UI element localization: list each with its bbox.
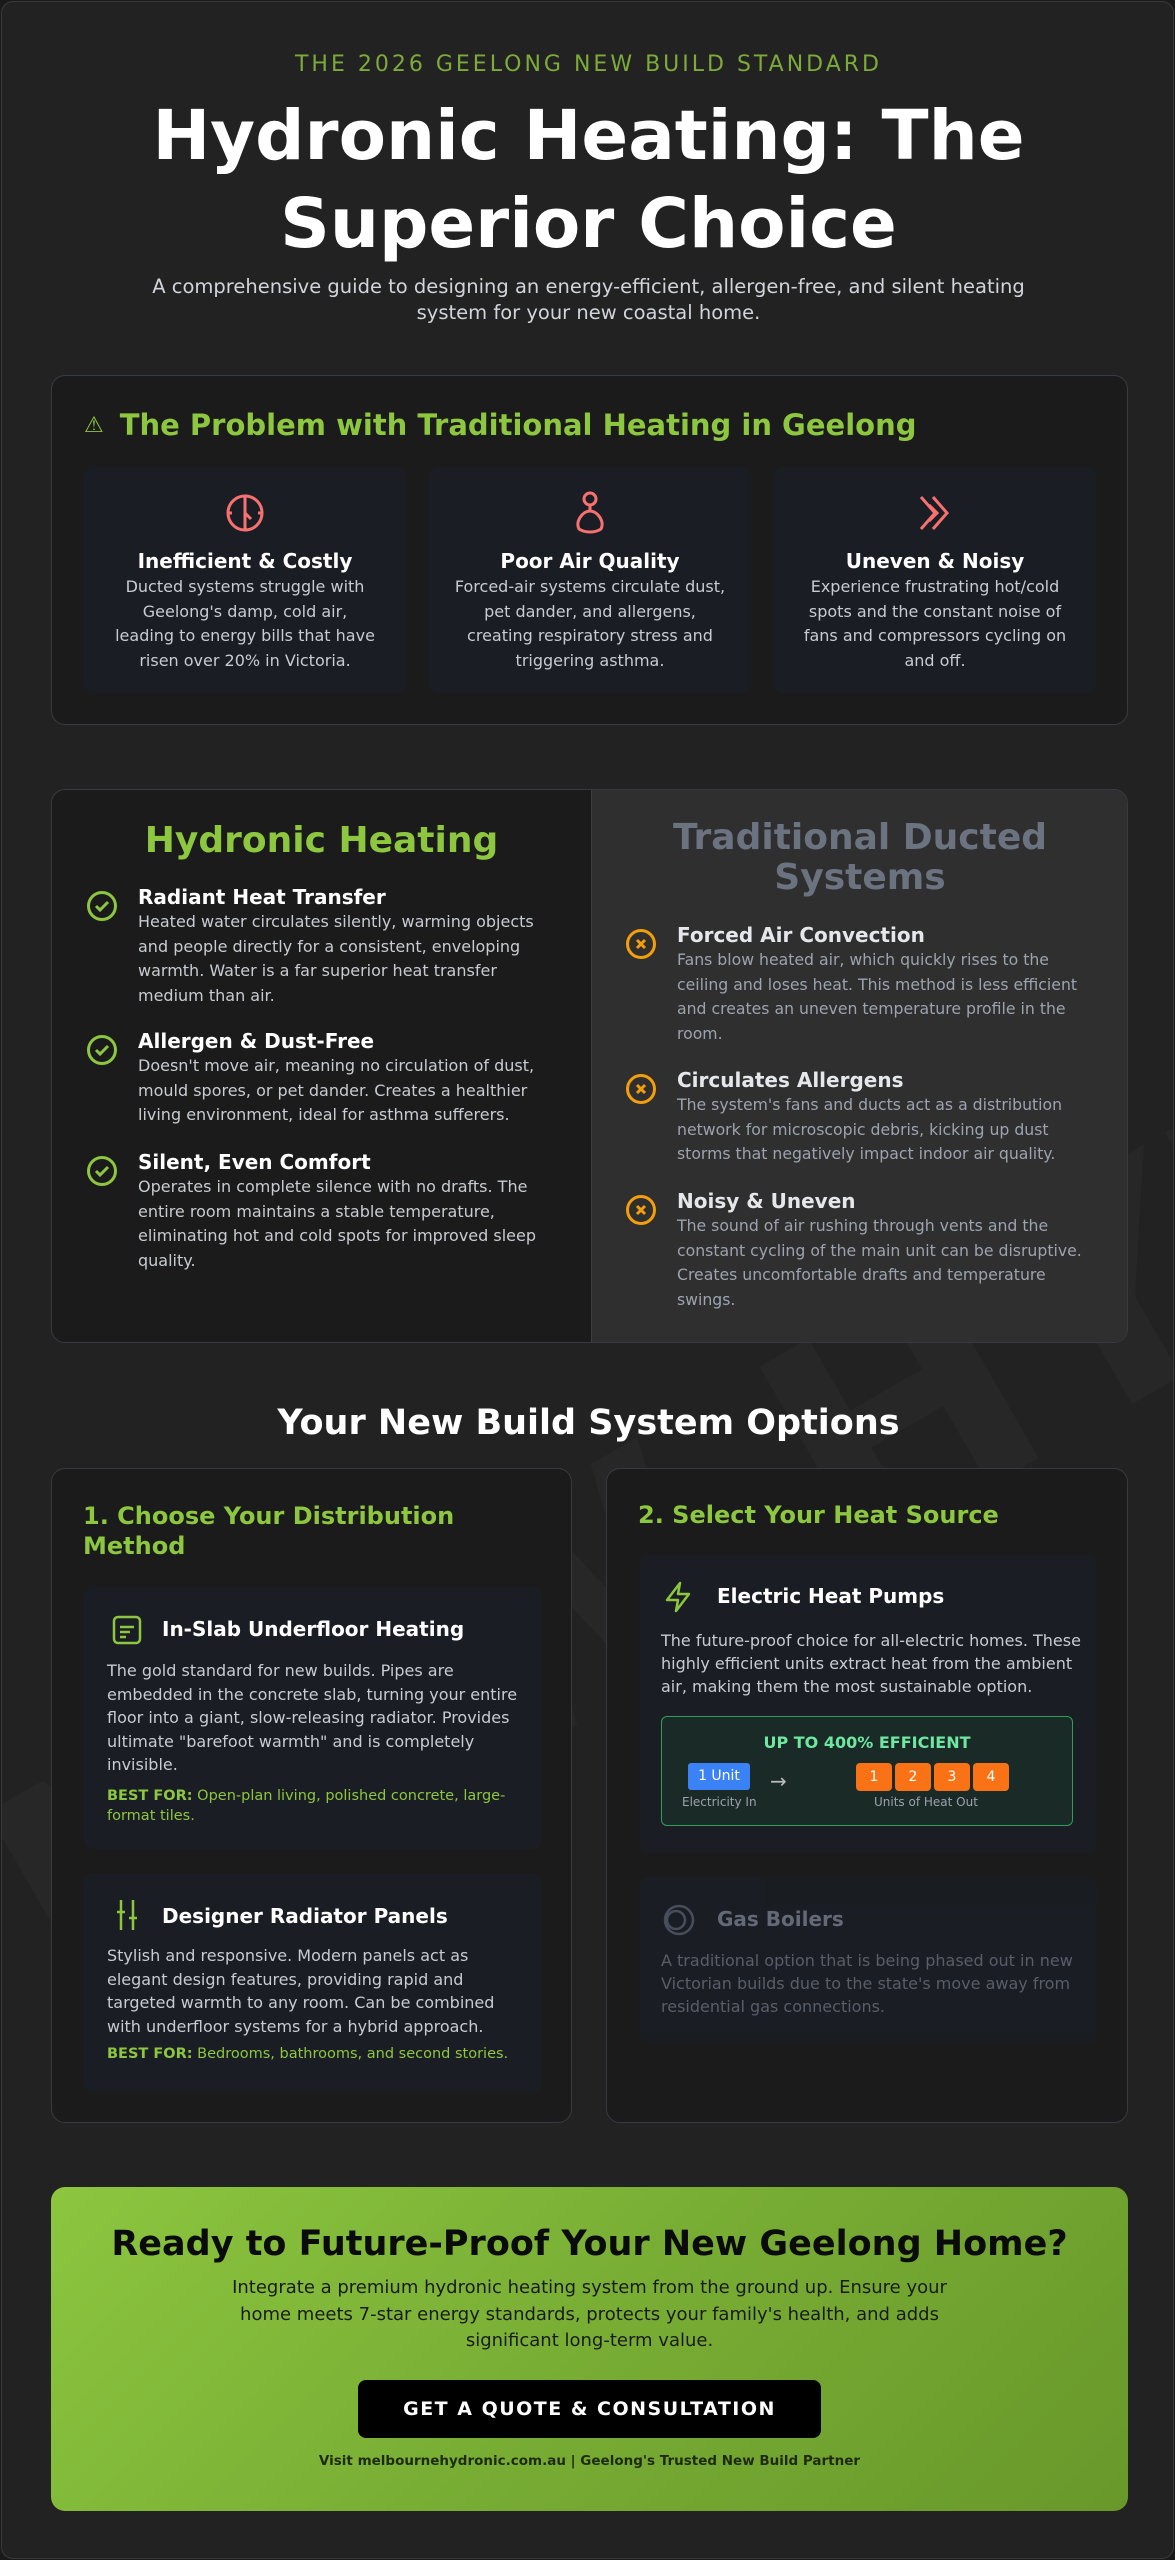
card: gas boilers: Gas Boilers [717,1907,844,1931]
right side background [591,790,1129,1344]
efficiency diagram: 1 [870,1769,878,1785]
card: radiators: BEST FOR: Bedrooms, bathrooms, and second stories. [107,2046,508,2062]
icon: radiator [117,1900,137,1930]
card: heat pumps: Electric Heat Pumps [717,1584,944,1608]
item: noisy [626,1189,1082,1308]
card: gas boilers: A traditional option that is being phased out in new Victorian builds due to the state's move away from residential gas connections. [661,1951,1073,2016]
efficiency diagram: 4 [987,1769,995,1785]
item: noisy: The sound of air rushing through vents and the constant cycling of the main unit can be disruptive. Creates uncomfortable drafts and temperature swings. [677,1216,1082,1308]
card: in-slab: In-Slab Underfloor Heating [162,1617,464,1641]
distribution heading: 1. Choose Your Distribution Method [83,1502,454,1560]
efficiency diagram [661,1716,1073,1826]
card: radiators [84,1874,542,2092]
ducted heading: Traditional Ducted [673,817,1047,858]
card: radiators: Stylish and responsive. Modern panels act as elegant design features, providing rapid and targeted warmth to any room. Can be combined with underfloor systems for a hybrid approach. [107,1946,494,2036]
card: uneven: Uneven & Noisy [846,549,1024,573]
eyebrow: THE 2026 GEELONG NEW BUILD STANDARD [295,52,882,77]
hydronic heading: Hydronic Heating [145,820,498,861]
CTA button: GET A QUOTE & CONSULTATION [403,2398,776,2420]
card: in-slab: BEST FOR: Open-plan living, polished concrete, large-format tiles. [107,1788,505,1824]
card: heat pumps: The future-proof choice for all-electric homes. These highly efficient units extract heat from the ambient air, making them the most sustainable option. [661,1631,1081,1696]
CTA footer: Visit melbournehydronic.com.au | Geelong's Trusted New Build Partner [319,2453,860,2469]
item: forced air: Forced Air Convection [677,923,925,947]
title: Superior Choice [280,184,897,264]
efficiency diagram: 3 [948,1769,956,1785]
item: noisy: Noisy & Uneven [677,1189,856,1213]
panel: heat source [606,1468,1128,2123]
icon: bolt [666,1582,690,1612]
hydronic column [87,820,536,1270]
item: allergen: Doesn't move air, meaning no circulation of dust, mould spores, or pet dander. Creates a healthier living environment, ideal for asthma sufferers. [138,1056,534,1124]
card: inefficient: Ducted systems struggle with Geelong's damp, cold air, leading to energy bills that have risen over 20% in Victoria. [115,577,375,670]
item: forced air [626,923,1077,1042]
item: allergens: The system's fans and ducts act as a distribution network for microscopic debris, kicking up dust storms that negatively impact indoor air quality. [677,1095,1062,1163]
item: radiant [87,885,534,1004]
item: allergen [87,1029,534,1124]
CTA text: Integrate a premium hydronic heating system from the ground up. Ensure your home meets 7-star energy standards, protects your family's health, and adds significant long-term value. [232,2277,947,2351]
efficiency diagram: 1 Unit [698,1768,740,1784]
efficiency diagram: Units of Heat Out [874,1795,978,1809]
card: air quality [429,467,751,693]
panel: problem [51,375,1128,725]
card: inefficient: Inefficient & Costly [138,549,352,573]
title: Hydronic Heating: The [152,96,1025,176]
efficiency diagram: → [770,1769,787,1793]
card: air quality: Poor Air Quality [500,549,680,573]
item: silent: Silent, Even Comfort [138,1150,371,1174]
options heading: Your New Build System Options [277,1403,900,1443]
icon: slab [112,1616,142,1644]
card: air quality: Forced-air systems circulate dust, pet dander, and allergens, creating respiratory stress and triggering asthma. [455,577,725,670]
card: in-slab: The gold standard for new builds. Pipes are embedded in the concrete slab, turning your entire floor into a giant, slow-releasing radiator. Provides ultimate "barefoot warmth" and is completely invisible. [107,1661,517,1774]
ducted column [626,817,1082,1308]
CTA heading: Ready to Future-Proof Your New Geelong Home? [111,2224,1068,2264]
efficiency diagram: Electricity In [682,1795,757,1809]
item: radiant: Radiant Heat Transfer [138,885,386,909]
item: radiant: Heated water circulates silently, warming objects and people directly for a consistent, enveloping warmth. Water is a far superior heat transfer medium than air. [138,912,534,1004]
efficiency diagram: 2 [909,1769,917,1785]
card: uneven: Experience frustrating hot/cold spots and the constant noise of fans and compressors cycling on and off. [804,577,1066,670]
panel: comparison [51,789,1128,1343]
icon: person [576,492,604,534]
item: silent: Operates in complete silence with no drafts. The entire room maintains a stable temperature, eliminating hot and cold spots for improved sleep quality. [138,1177,536,1270]
item: silent [87,1150,536,1270]
title [152,96,1025,264]
efficiency diagram: UP TO 400% EFFICIENT [763,1733,971,1752]
ducted heading [673,817,1047,898]
card: heat pumps [639,1555,1097,1853]
card: inefficient [84,467,406,693]
card: in-slab [84,1587,542,1849]
card: gas boilers [639,1877,1097,2043]
icon: chevrons [920,496,949,530]
CTA button [358,2380,821,2438]
item: allergens [626,1068,1062,1163]
icon: gas [664,1904,694,1936]
card: radiators: Designer Radiator Panels [162,1904,448,1928]
item: forced air: Fans blow heated air, which quickly rises to the ceiling and loses heat. This method is less efficient and creates an uneven temperature profile in the room. [677,950,1077,1042]
heat source heading: 2. Select Your Heat Source [638,1501,999,1529]
card: uneven [774,467,1096,693]
ducted heading: Systems [774,857,946,898]
icon: clock [226,494,264,532]
panel: distribution [51,1468,572,2123]
subtitle: A comprehensive guide to designing an energy-efficient, allergen-free, and silent heating system for your new coastal home. [152,275,1025,324]
problem heading: ⚠ The Problem with Traditional Heating in Geelong [84,408,916,442]
item: allergen: Allergen & Dust-Free [138,1029,374,1053]
panel: CTA [51,2187,1128,2511]
item: allergens: Circulates Allergens [677,1068,903,1092]
